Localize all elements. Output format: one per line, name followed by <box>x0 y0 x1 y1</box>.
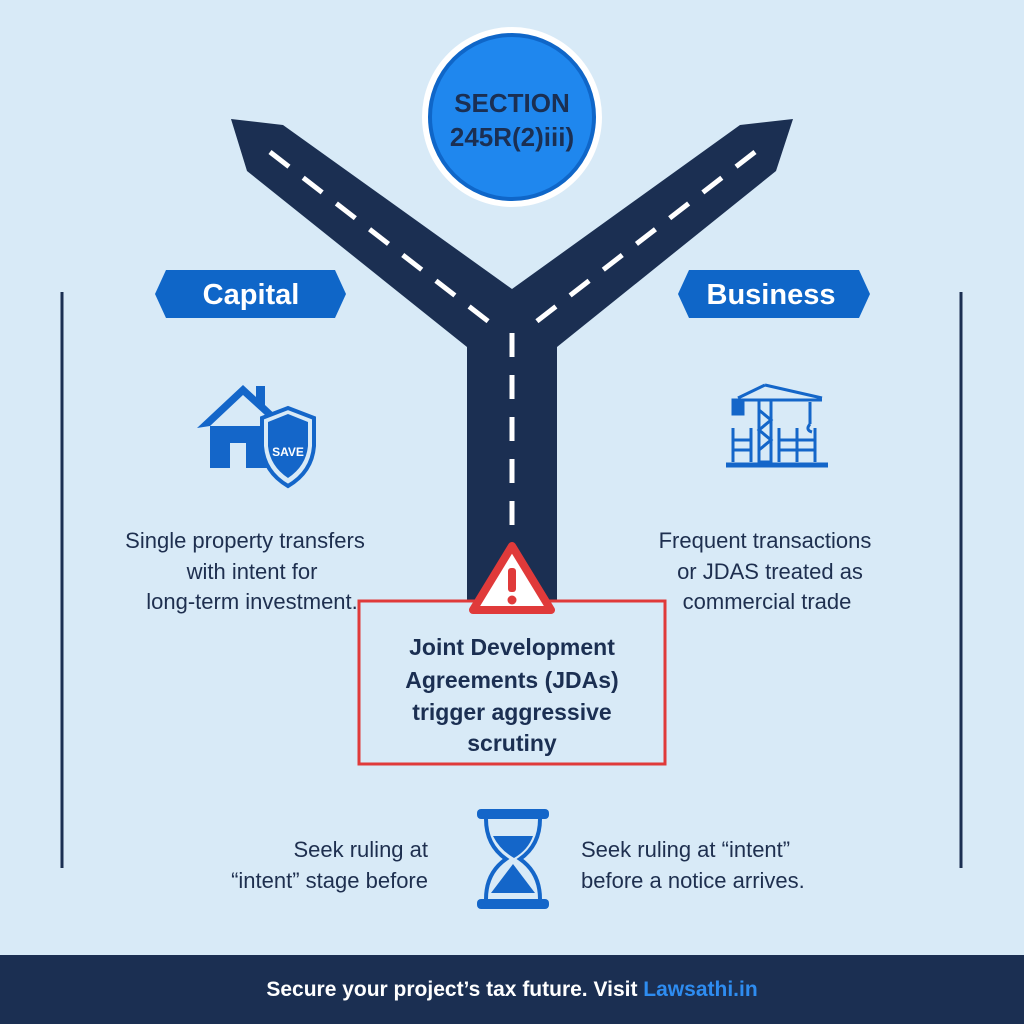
callout: JDA warning box <box>359 601 665 764</box>
text: right tip: Seek ruling at “intent” <box>581 837 790 862</box>
label: Capital ribbon: Capital <box>203 279 299 311</box>
callout: JDA warning box: Joint Development <box>409 634 615 660</box>
text: capital description: with intent for <box>186 559 317 584</box>
text: business description: or JDAS treated as <box>677 559 863 584</box>
text: right tip: before a notice arrives. <box>581 868 805 893</box>
badge: section circle: SECTION <box>454 88 570 118</box>
icon: construction crane <box>726 385 828 465</box>
icon: hourglass <box>477 809 549 909</box>
icon: house with SAVE shield: SAVE <box>272 445 304 459</box>
text: capital description: Single property transfers <box>125 528 365 553</box>
callout: JDA warning box: scrutiny <box>467 730 557 756</box>
text: business description <box>659 528 871 614</box>
text: capital description <box>125 528 365 614</box>
text: left tip <box>231 837 428 893</box>
text: right tip <box>581 837 805 893</box>
footer <box>0 955 1024 1024</box>
text: business description: Frequent transactions <box>659 528 871 553</box>
text: left tip: Seek ruling at <box>293 837 428 862</box>
label: Business ribbon <box>678 270 870 318</box>
icon: house with SAVE shield <box>197 385 314 486</box>
badge: section circle <box>422 27 602 207</box>
label: Business ribbon: Business <box>707 279 835 311</box>
road: forked Y road <box>231 119 793 600</box>
icon: warning triangle <box>473 546 551 610</box>
text: capital description: long-term investment. <box>146 589 358 614</box>
badge: section circle: 245R(2)iii) <box>450 122 574 152</box>
text: left tip: “intent” stage before <box>231 868 428 893</box>
text: business description: commercial trade <box>683 589 851 614</box>
callout: JDA warning box: trigger aggressive <box>412 699 612 725</box>
callout: JDA warning box: Agreements (JDAs) <box>405 667 619 693</box>
label: Capital ribbon <box>155 270 346 318</box>
footer: Secure your project’s tax future. Visit Lawsathi.in <box>266 978 758 1001</box>
